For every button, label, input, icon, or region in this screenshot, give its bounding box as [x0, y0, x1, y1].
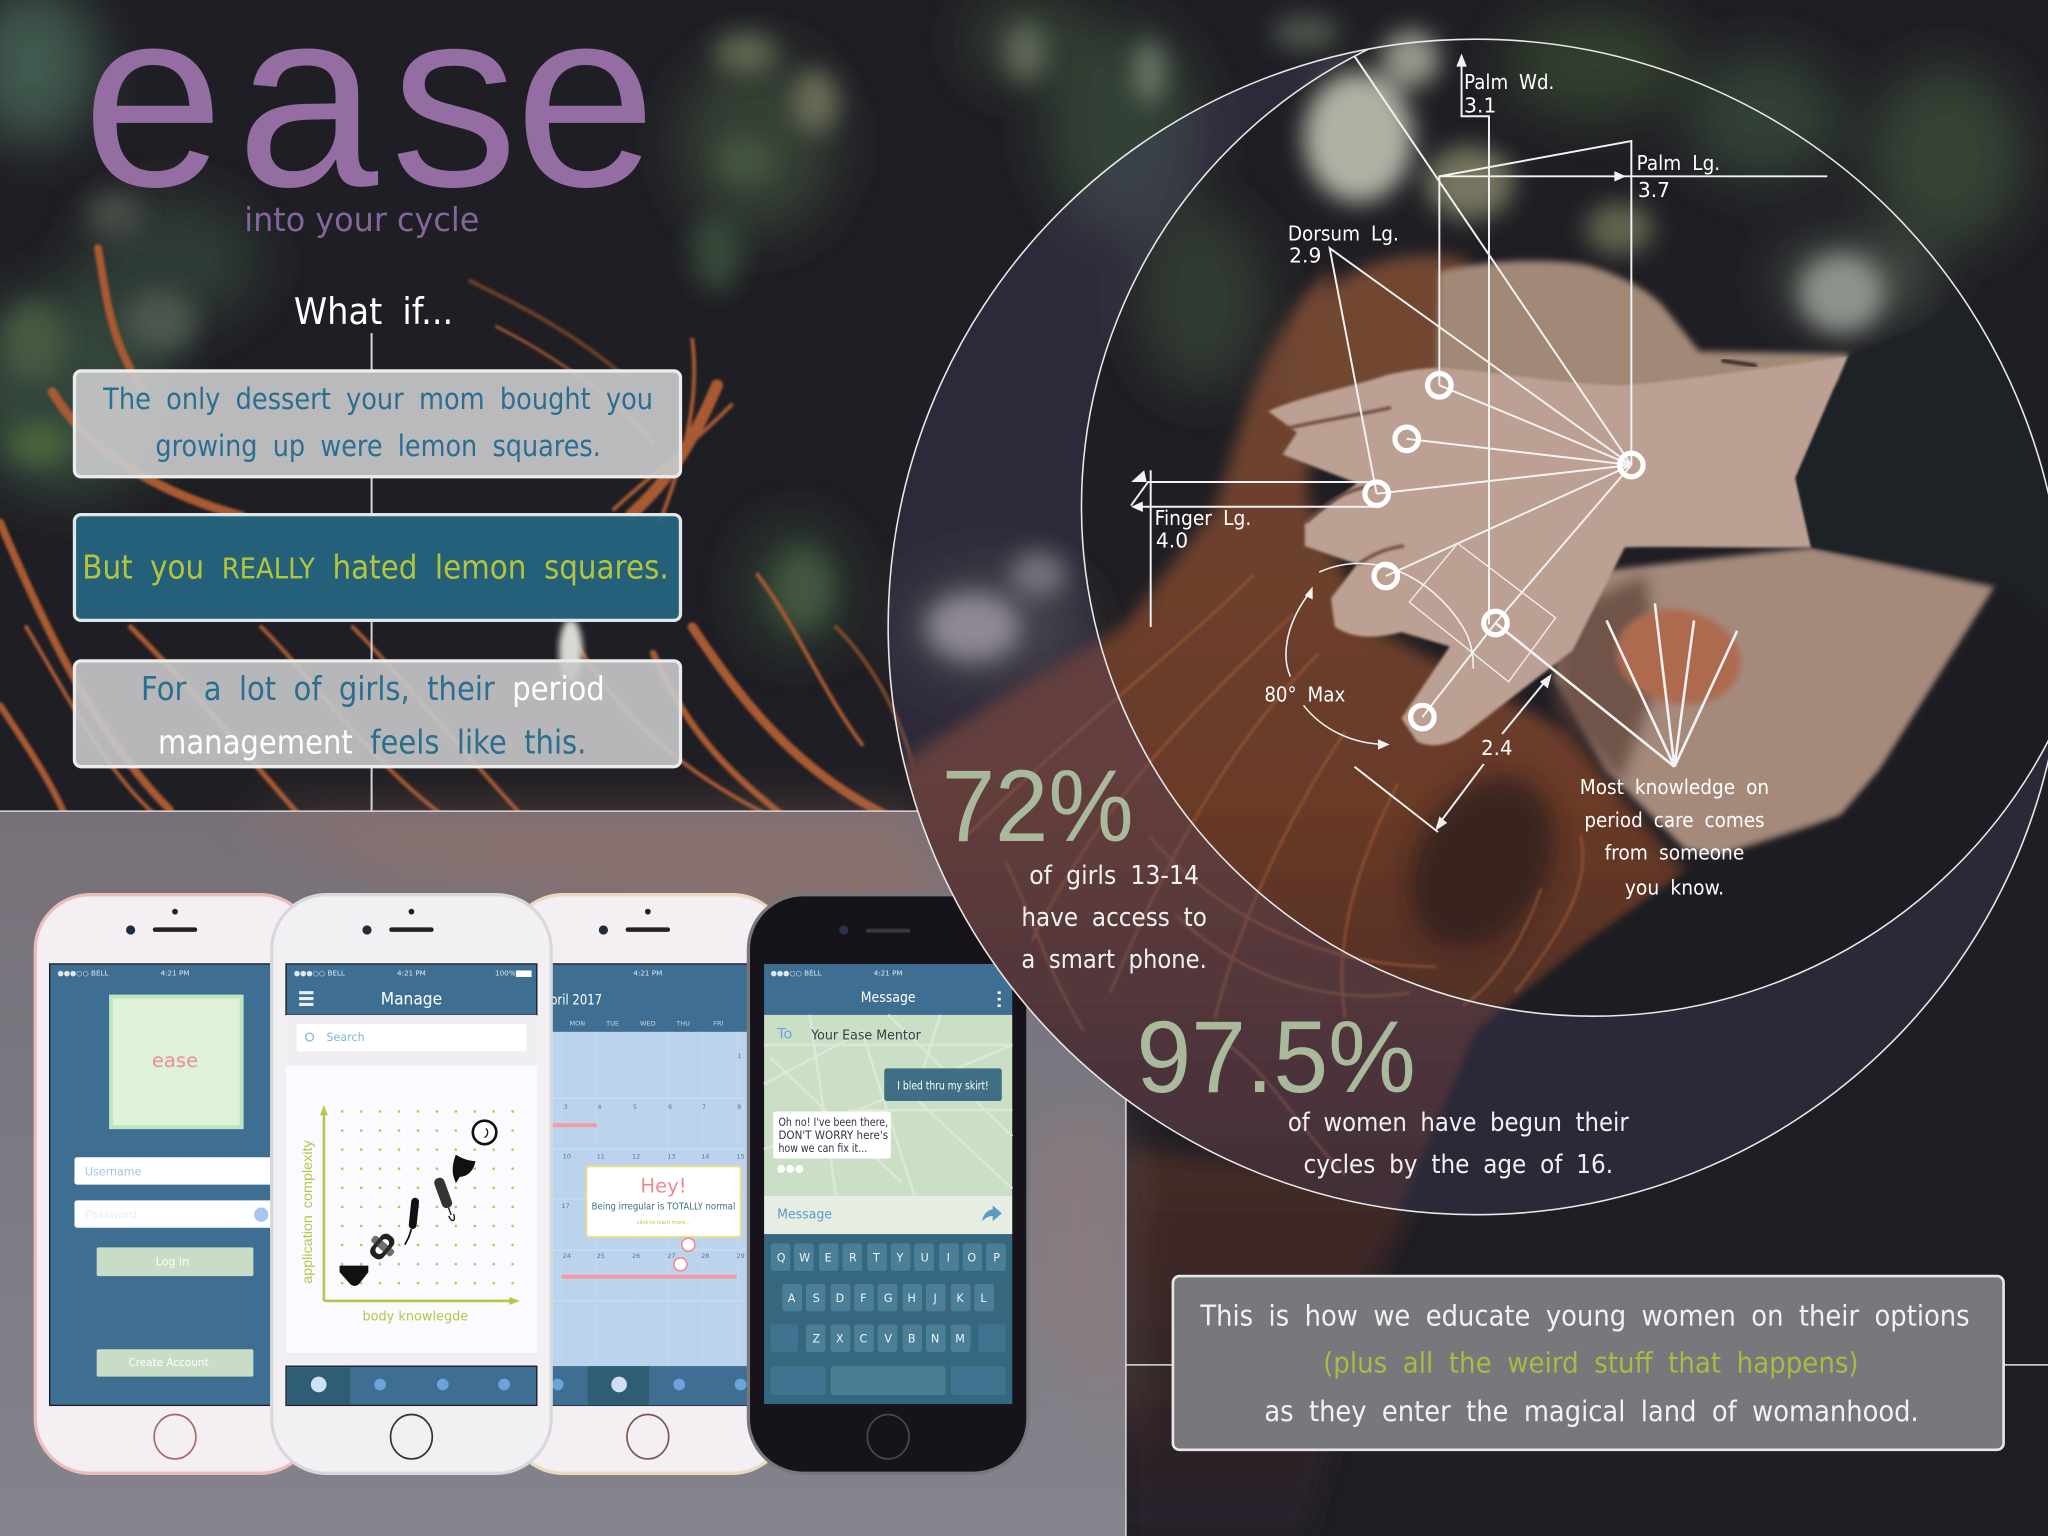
log in button	[97, 1247, 253, 1276]
panel: lower-left grey phones backdrop	[0, 810, 1126, 1536]
circle outlines	[888, 0, 2048, 1215]
chart axes	[324, 1112, 515, 1301]
y axis label: application complexity	[300, 1140, 315, 1284]
callout: how we educate: (plus all the weird stuff that happens)	[1323, 1346, 1859, 1380]
period bars	[552, 1123, 737, 1279]
popup: Hey	[586, 1166, 741, 1237]
screen header: 4:21 PM	[397, 969, 426, 978]
callout: how we educate: as they enter the magical land of womanhood.	[1264, 1394, 1919, 1428]
dorsum triangle	[1330, 248, 1631, 494]
keyboard: Y	[896, 1252, 904, 1265]
shadow under thumb	[1400, 766, 1565, 956]
log in button: Log In	[156, 1256, 189, 1269]
pink hair haze	[235, 810, 1123, 1450]
reply bubble: Oh no! I've been there,	[778, 1116, 888, 1129]
heading: What if: What if...	[294, 290, 453, 333]
ear	[1613, 606, 1744, 708]
calendar dates: 1	[737, 1052, 741, 1060]
chart area	[286, 1066, 537, 1366]
calendar dates: 6	[668, 1103, 672, 1111]
map background	[764, 1015, 1012, 1195]
reply bubble: how we can fix it...	[778, 1142, 867, 1155]
text: most knowledge: you know.	[1625, 876, 1724, 900]
text box: period management: management feels like this.	[158, 724, 586, 762]
search band	[286, 1015, 537, 1066]
month heading: April 2017	[542, 992, 602, 1008]
keyboard: J	[933, 1292, 937, 1305]
home button	[627, 1415, 669, 1459]
to field: To	[776, 1026, 792, 1042]
text box: lemon squares setup	[74, 371, 680, 477]
stat: 97.5 percent: cycles by the age of 16.	[1304, 1150, 1613, 1180]
icon: menstrual cup	[453, 1155, 475, 1183]
label: palm width	[1464, 70, 1554, 117]
calendar dates: 15	[736, 1153, 745, 1161]
message header	[764, 964, 1012, 1015]
main hair mass	[903, 266, 1690, 1178]
finger length guide	[1131, 470, 1377, 627]
password field	[74, 1200, 303, 1228]
sent bubble: I bled thru my skirt!	[897, 1079, 989, 1092]
calendar dates: 14	[701, 1153, 709, 1161]
icon: tampon	[433, 1176, 458, 1222]
label: 2.4: 2.4	[1481, 736, 1512, 760]
callout connector lines	[1126, 1364, 2048, 1366]
create account button	[97, 1349, 253, 1377]
screen header: Manage	[381, 989, 442, 1009]
neck	[1554, 547, 1998, 862]
callout: how we educate: This is how we educate young women on their options	[1199, 1299, 1970, 1333]
calendar dates: 26	[632, 1252, 640, 1260]
calendar dates: 12	[632, 1153, 640, 1161]
x axis label: body knowlegde	[362, 1308, 468, 1324]
hair top	[1306, 246, 1474, 397]
message input bar	[764, 1195, 1012, 1234]
username field	[74, 1157, 303, 1185]
text: most knowledge: from someone	[1605, 840, 1744, 864]
hair below the circle	[1126, 1149, 1424, 1536]
keyboard: Z	[813, 1333, 821, 1346]
logo tile	[111, 997, 242, 1127]
login screen background	[50, 964, 300, 1405]
keyboard: I	[947, 1252, 950, 1265]
pale hair highlight	[559, 619, 583, 682]
dot grid	[338, 1108, 517, 1287]
keyboard: P	[993, 1252, 1000, 1265]
speaker and camera	[362, 909, 434, 935]
calendar grid	[522, 1032, 773, 1366]
phone: manage chart screen	[272, 895, 551, 1473]
calendar dates: 24	[563, 1252, 571, 1260]
phone speaker and camera	[126, 909, 197, 935]
message input bar: Message	[777, 1208, 832, 1223]
axis arrowheads	[320, 1105, 520, 1305]
keyboard	[764, 1234, 1012, 1404]
label: 80 degrees max: 80° Max	[1264, 682, 1345, 706]
text: most knowledge	[1580, 775, 1769, 900]
label: finger length: 4.0	[1156, 528, 1188, 552]
text box: lemon squares setup: growing up were lemon squares.	[155, 429, 601, 463]
weekday labels	[569, 1019, 724, 1027]
keyboard: M	[955, 1333, 965, 1346]
photo inside circle: hair, head, hand and clothing	[889, 51, 2048, 1214]
calendar dates: 27	[667, 1252, 675, 1260]
create account button: Create Account	[128, 1357, 209, 1369]
keyboard: E	[825, 1252, 832, 1265]
label: palm length: 3.7	[1638, 178, 1670, 202]
tab bar	[522, 1366, 773, 1405]
forehead	[1437, 261, 1848, 398]
80 degree arc	[1286, 563, 1473, 744]
calendar dates: 10	[563, 1153, 571, 1161]
text: most knowledge: Most knowledge on	[1580, 775, 1769, 799]
date markers	[674, 1238, 695, 1271]
screen header	[286, 964, 537, 1015]
to field	[776, 1026, 921, 1044]
calendar dates: 3	[563, 1103, 568, 1111]
calendar dates: 5	[633, 1103, 637, 1111]
label: finger length	[1155, 506, 1251, 552]
palm width guide	[1462, 59, 1489, 624]
keyboard: F	[860, 1292, 867, 1305]
logo tile: ease	[152, 1049, 198, 1072]
calendar screen background	[522, 964, 773, 1405]
keyboard: C	[859, 1333, 867, 1346]
smaller leaves and flowers	[3, 14, 1883, 661]
keyboard: N	[931, 1333, 939, 1346]
phone: calendar screen	[508, 895, 788, 1473]
neck shadow	[1554, 575, 1659, 784]
keyboard: O	[967, 1252, 976, 1265]
home button	[154, 1415, 196, 1459]
keyboard: B	[908, 1333, 915, 1346]
status time: 4:21 PM	[633, 969, 662, 978]
screen header: 100%	[495, 969, 516, 978]
panel outline	[0, 811, 1126, 1536]
stat: 97.5 percent: 97.5%	[1136, 1000, 1416, 1114]
home button	[867, 1415, 909, 1459]
status bar: ●●●○○ BELL	[57, 969, 108, 978]
stat: 97.5 percent: of women have begun their	[1288, 1108, 1629, 1138]
keyboard: A	[788, 1292, 796, 1305]
keyboard: G	[884, 1292, 892, 1305]
fan lines	[1496, 603, 1737, 767]
icon: menstrual disc	[473, 1121, 496, 1144]
popup: Hey: Being irregular is TOTALLY normal	[592, 1201, 735, 1212]
calendar dates: 4	[597, 1103, 602, 1111]
weekday labels: MON	[569, 1019, 585, 1027]
keyboard: L	[980, 1292, 987, 1305]
flowing hair strands	[0, 248, 914, 816]
keyboard: R	[849, 1252, 857, 1265]
icon: pad	[363, 1228, 401, 1265]
stat: 72 percent: a smart phone.	[1021, 945, 1207, 975]
text: most knowledge: period care comes	[1584, 808, 1765, 832]
keyboard: T	[872, 1252, 880, 1265]
speaker and camera	[599, 909, 670, 935]
keyboard: U	[921, 1252, 929, 1265]
hair texture strands	[967, 575, 1583, 1176]
icon: underwear	[340, 1266, 368, 1286]
connector lines	[371, 333, 373, 811]
eye line	[1721, 360, 1757, 366]
hub spokes	[1377, 385, 1631, 717]
phone: message screen	[748, 895, 1028, 1473]
message header: 4:21 PM	[874, 969, 903, 978]
icon: tampon applicator	[405, 1197, 419, 1245]
callout: how we educate	[1173, 1276, 2004, 1450]
diagram labels	[1155, 70, 1720, 760]
dark clothing	[1400, 584, 2037, 1211]
speaker and camera	[839, 925, 910, 935]
reply bubble	[773, 1112, 891, 1159]
sleeve	[1794, 305, 1952, 573]
stat: 72 percent	[942, 749, 1207, 975]
phone: login screen	[35, 895, 315, 1473]
keyboard: K	[956, 1292, 964, 1305]
popup: Hey: click to learn more...	[637, 1220, 691, 1226]
rotated square	[1409, 543, 1556, 682]
label: finger length: Finger Lg.	[1155, 506, 1251, 530]
message header: Message	[861, 990, 916, 1006]
calendar dates: 29	[736, 1252, 745, 1260]
keyboard: V	[884, 1333, 892, 1346]
label: palm length: Palm Lg.	[1637, 151, 1720, 175]
hand measurement diagram	[1131, 54, 1827, 832]
screen header: ●●●○○ BELL	[294, 969, 345, 978]
crescent tint	[889, 51, 2048, 1214]
label: palm width: Palm Wd.	[1464, 70, 1554, 94]
home button	[391, 1415, 432, 1459]
weekday labels: THU	[675, 1019, 690, 1027]
label: dorsum length	[1288, 221, 1399, 268]
tagline: into your cycle	[244, 201, 479, 239]
text box: really hated	[74, 515, 680, 620]
stat: 97.5 percent	[1136, 1000, 1629, 1180]
search band: Search	[327, 1031, 365, 1044]
calendar dates: 25	[597, 1252, 605, 1260]
text box: lemon squares setup: The only dessert your mom bought you	[102, 382, 653, 416]
stat: 72 percent: have access to	[1021, 903, 1207, 933]
keyboard: S	[813, 1292, 820, 1305]
calendar dates	[561, 1052, 745, 1260]
foliage blobs	[0, 0, 2024, 686]
arrowheads	[1131, 54, 1626, 831]
text box: really hated: But you REALLY hated lemon squares.	[82, 549, 669, 587]
weekday labels: FRI	[713, 1019, 724, 1027]
keyboard: D	[836, 1292, 844, 1305]
calendar dates: 8	[737, 1103, 741, 1111]
keyboard: X	[836, 1333, 844, 1346]
weekday labels: TUE	[605, 1019, 619, 1027]
text box: period management	[74, 661, 680, 767]
label: dorsum length: Dorsum Lg.	[1288, 221, 1399, 245]
keyboard: Q	[777, 1252, 786, 1265]
reply bubble: DON'T WORRY here's	[778, 1129, 888, 1142]
sent bubble	[884, 1068, 1002, 1101]
stat: 72 percent: of girls 13-14	[1029, 861, 1199, 891]
joint rings	[1365, 374, 1643, 729]
text box: period management: For a lot of girls, their period	[141, 670, 605, 708]
hand	[1268, 357, 1848, 745]
calendar dates: 17	[561, 1202, 570, 1210]
password field: Password	[85, 1209, 137, 1222]
keyboard: W	[799, 1252, 810, 1265]
tab bar	[286, 1366, 537, 1405]
message header: ●●●○○ BELL	[771, 969, 822, 978]
label: palm length	[1637, 151, 1720, 202]
palm length guide	[1439, 141, 1827, 465]
apex line	[1354, 56, 1631, 465]
popup: Hey: Hey!	[640, 1174, 687, 1197]
weekday labels: WED	[640, 1019, 656, 1027]
calendar dates: 28	[701, 1252, 709, 1260]
to field: Your Ease Mentor	[810, 1028, 921, 1044]
calendar dates: 11	[597, 1153, 605, 1161]
status time: 4:21 PM	[161, 969, 189, 978]
username field: Username	[85, 1166, 142, 1179]
dimension 2.4	[1354, 677, 1549, 832]
typing dots	[777, 1165, 803, 1173]
stat: 72 percent: 72%	[942, 749, 1134, 863]
label: dorsum length: 2.9	[1289, 244, 1321, 268]
calendar dates: 13	[667, 1153, 675, 1161]
label: palm width: 3.1	[1464, 93, 1496, 117]
keyboard: H	[908, 1292, 916, 1305]
finger gaps	[1287, 408, 1404, 564]
calendar dates: 7	[702, 1103, 706, 1111]
